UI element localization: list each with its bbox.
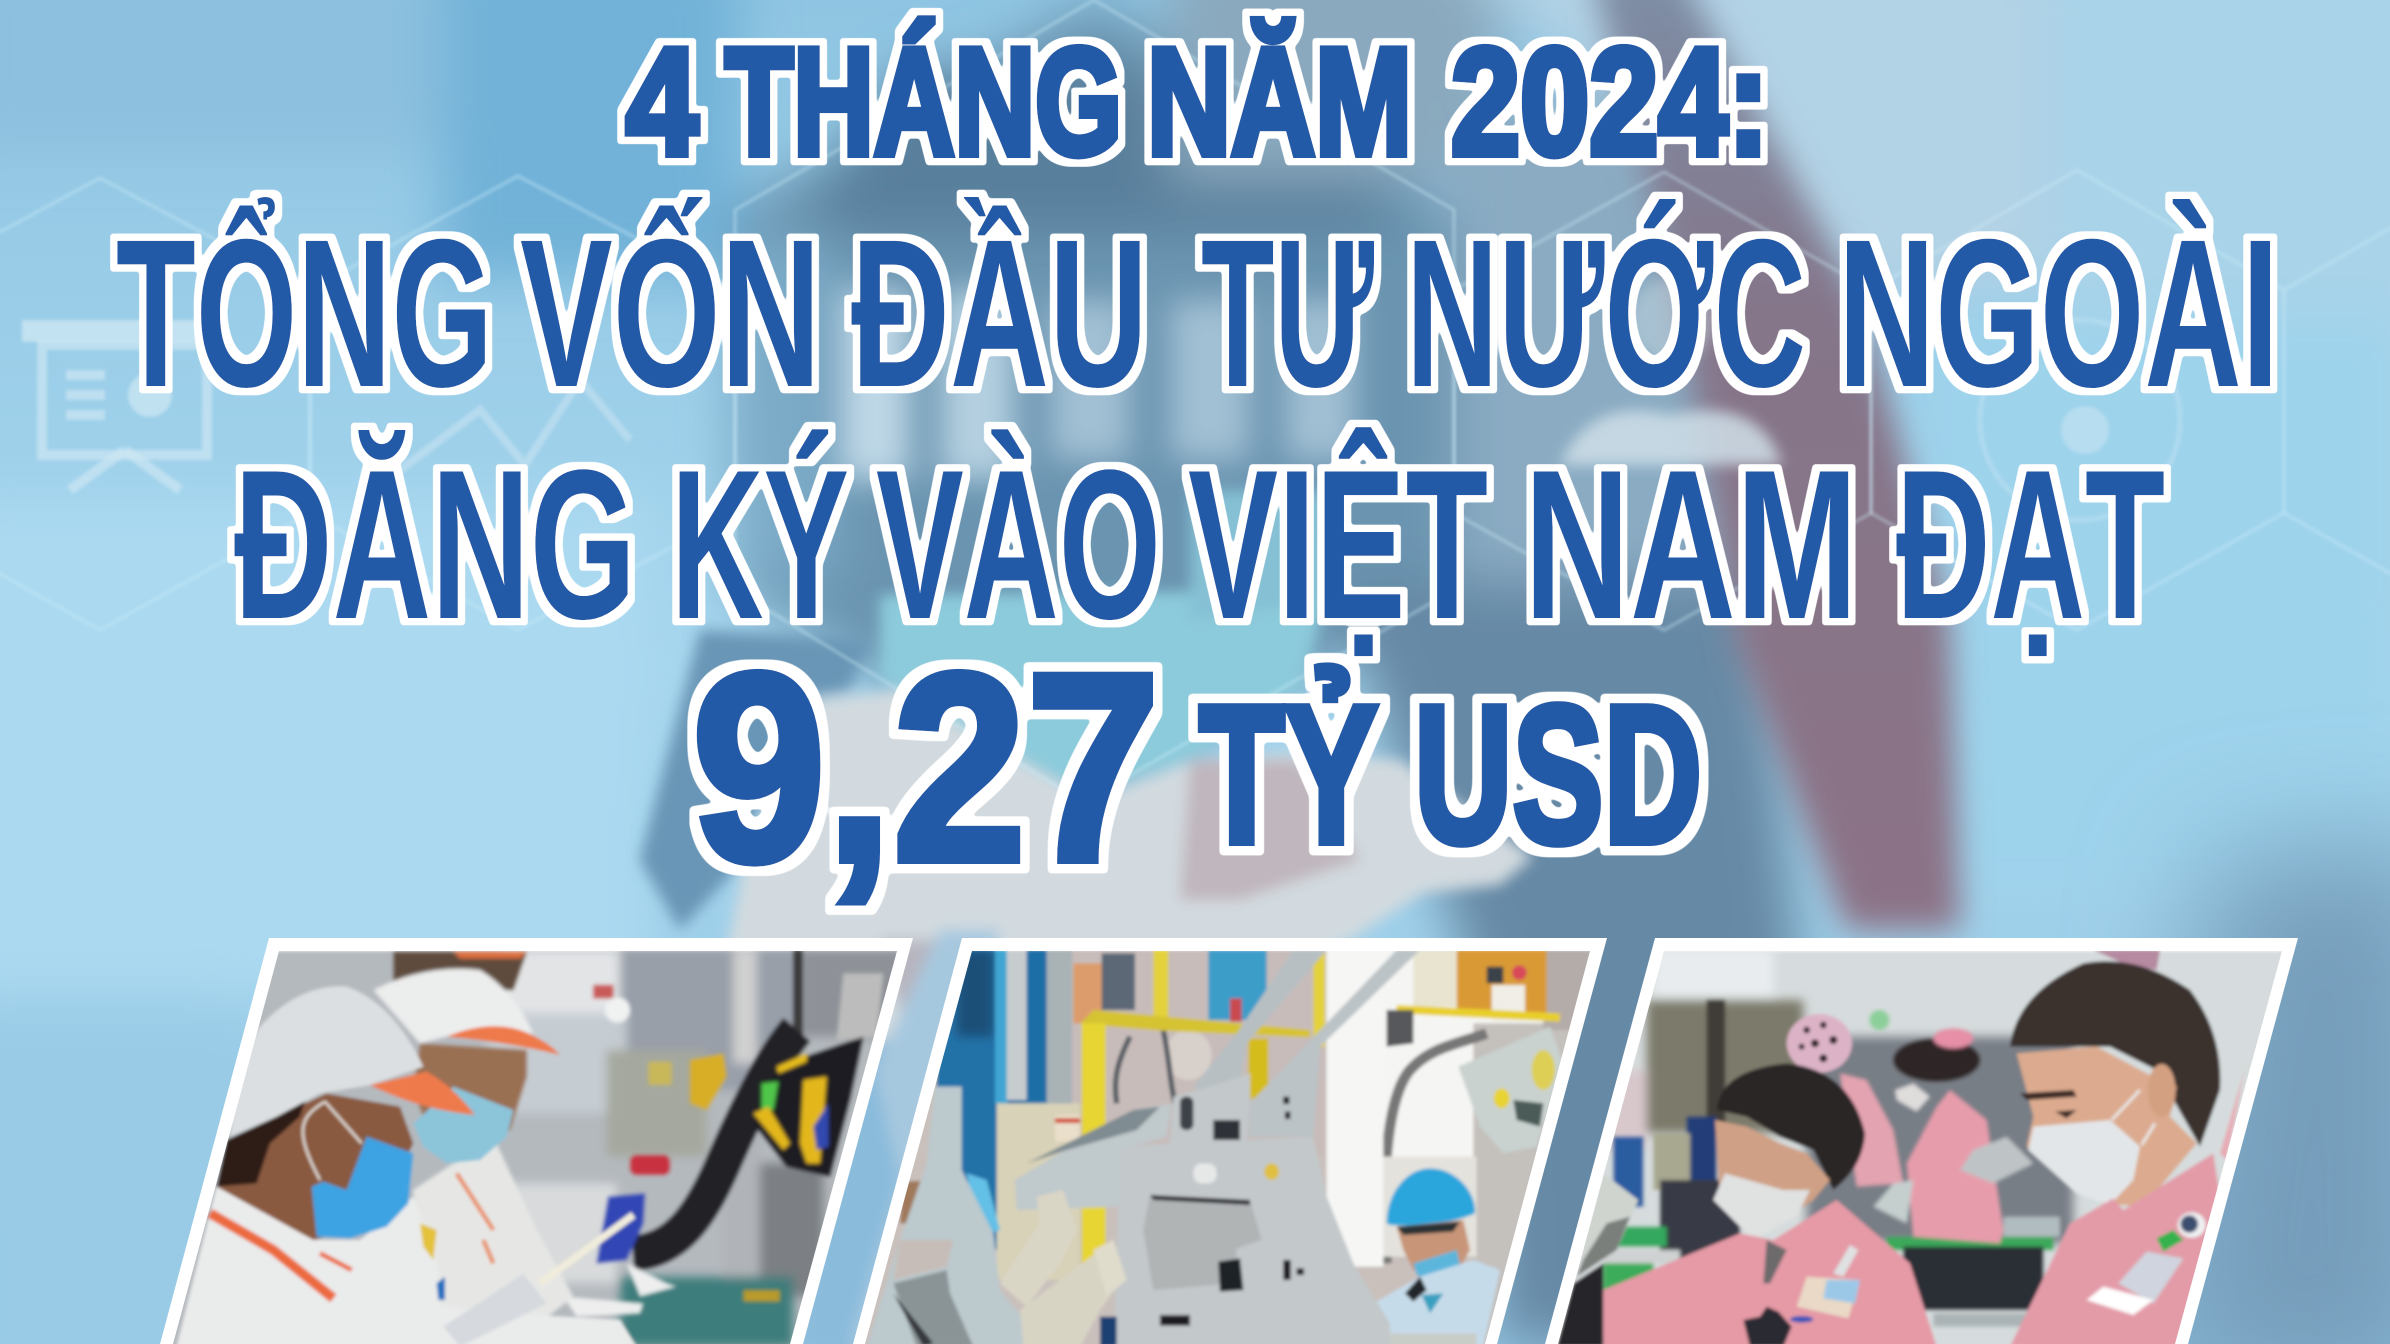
title line 3: VÀO <box>876 426 1161 664</box>
headline unit <box>1199 665 1702 884</box>
title line 2: NƯỚC <box>1406 195 1806 431</box>
person icon glow <box>1560 278 1782 465</box>
blurred INVEST lettering <box>840 290 1355 480</box>
right pillars and door panel <box>1193 950 1327 1097</box>
icon: shield circle <box>1980 320 2180 520</box>
lower right shaded shoulder <box>2150 840 2390 1344</box>
photo 3: workers in pink uniforms and white masks <box>1545 938 2298 1344</box>
left body pillar <box>868 1084 1023 1344</box>
white frame <box>1545 938 2298 1344</box>
photo 2: car body frame assembly with worker in blue helmet <box>853 938 1607 1344</box>
title line 3: ĐĂNG <box>234 426 636 664</box>
tie <box>1590 0 1960 930</box>
title line 3: ĐẠT <box>1896 426 2165 664</box>
photo 1: workers in white caps and blue masks <box>160 938 920 1344</box>
icon: presentation board <box>22 320 222 490</box>
hair <box>2010 961 2220 1147</box>
title line 3: NAM <box>1524 426 1858 664</box>
title line 3: VIỆT <box>1188 426 1488 664</box>
pale wrist and hand <box>725 690 1533 1040</box>
hexagon network lines <box>0 0 2390 802</box>
icon: line chart <box>400 380 630 470</box>
mask <box>2028 1120 2140 1205</box>
title line 1 <box>626 17 1769 187</box>
face <box>1715 1120 1830 1240</box>
back worker <box>413 1137 573 1344</box>
headline number: 9,27 <box>692 617 1160 917</box>
foreground woman bun <box>2093 950 2160 970</box>
bun <box>1787 1014 1852 1073</box>
title line 2 <box>116 195 2279 431</box>
slate left of finger <box>640 630 870 930</box>
title line 1: 4 <box>626 17 698 187</box>
headline unit: USD <box>1414 665 1702 884</box>
hair <box>1717 1063 1865 1190</box>
title line 2: TỔNG <box>116 195 493 431</box>
gloved arms <box>1000 1190 1077 1307</box>
uniform <box>2010 1153 2220 1344</box>
lower hexagon aqua glow <box>880 590 1330 795</box>
title line 2: ĐẦU <box>851 195 1148 431</box>
white frame <box>853 938 1607 1344</box>
title line 1: NĂM <box>1147 17 1412 187</box>
mask <box>1713 1173 1810 1240</box>
title line 2: VỐN <box>520 195 821 431</box>
front worker <box>177 1187 637 1344</box>
title line 1: THÁNG <box>725 17 1122 187</box>
title line 3 <box>234 426 2165 664</box>
uniform <box>1603 1200 1937 1344</box>
white frame <box>160 938 913 1344</box>
title line 2: TƯ <box>1201 195 1375 431</box>
face <box>2017 1047 2197 1207</box>
title line 1: 2024: <box>1451 17 1769 187</box>
title line 3: KÝ <box>671 426 849 664</box>
headline unit: TỶ <box>1199 665 1378 884</box>
